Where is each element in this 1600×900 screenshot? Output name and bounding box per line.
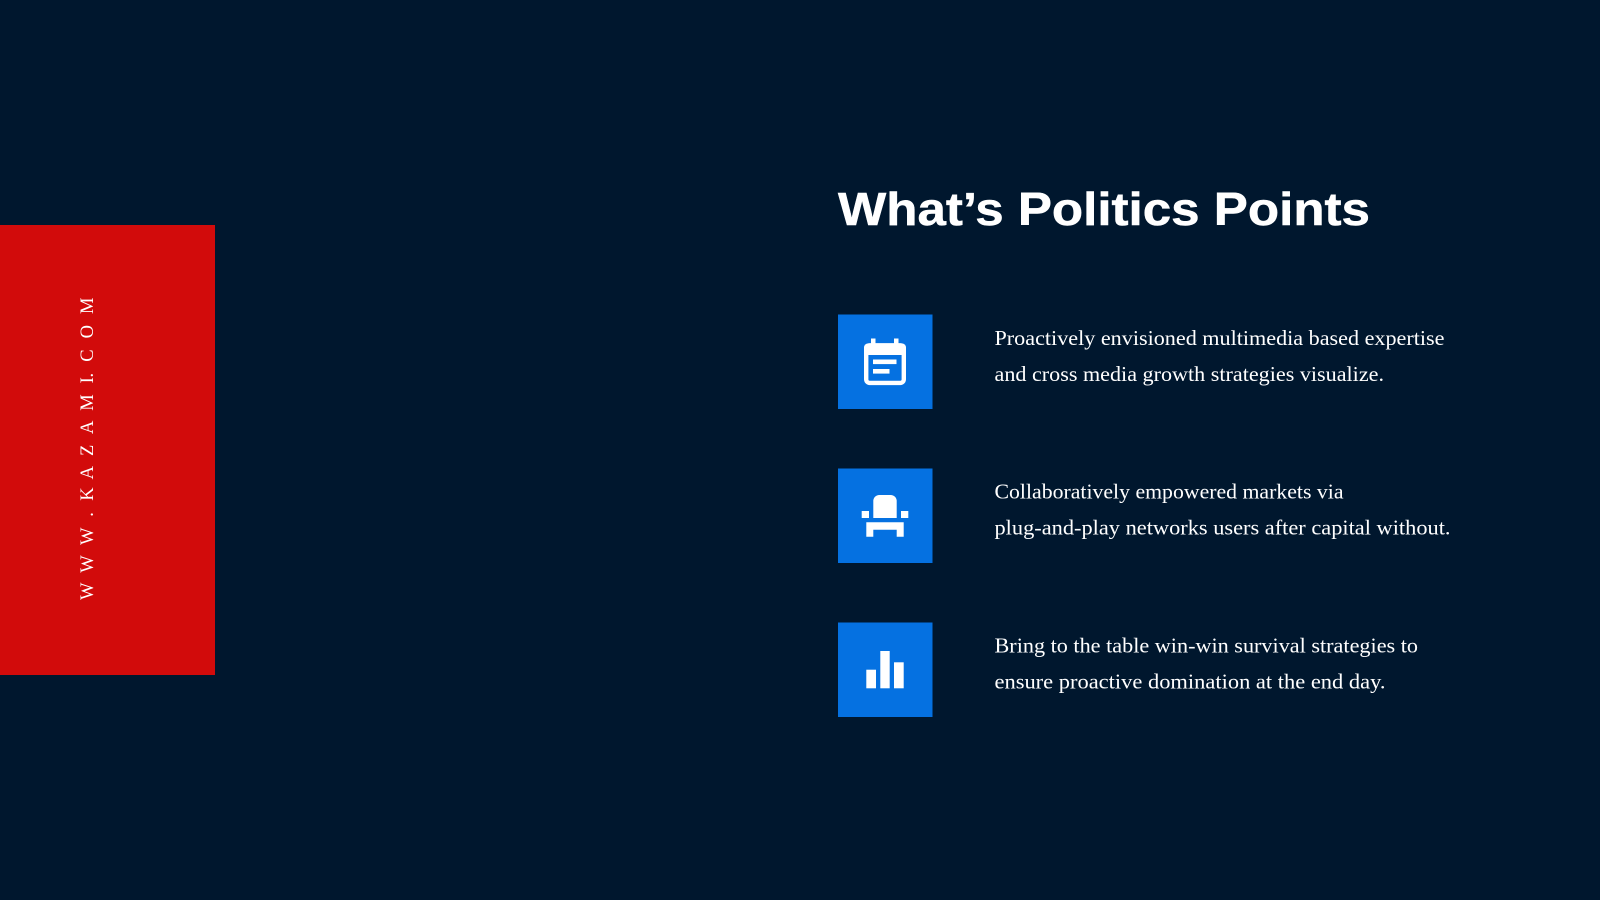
text: point 1: Proactively envisioned multimedia based expertise [994,326,1444,350]
panel: red side block [0,225,215,675]
text: point 3: ensure proactive domination at the end day. [994,670,1386,694]
icon: armchair [838,468,932,563]
icon: calendar [838,314,932,409]
text: point 3: Bring to the table win-win survival strategies to [994,634,1418,658]
item 1: calendar point [838,314,1450,409]
vertical website text: WWW.KAZAMI.COM [78,298,98,600]
text: point 2: plug-and-play networks users after capital without. [994,516,1450,540]
title: What’s Politics Points [838,183,1370,235]
text: point 1: and cross media growth strategies visualize. [994,362,1384,386]
item 3: bar chart point [838,622,1423,717]
item 2: armchair point [838,468,1450,563]
text: point 2: Collaboratively empowered markets via [994,480,1344,504]
icon: bar chart [838,622,932,717]
